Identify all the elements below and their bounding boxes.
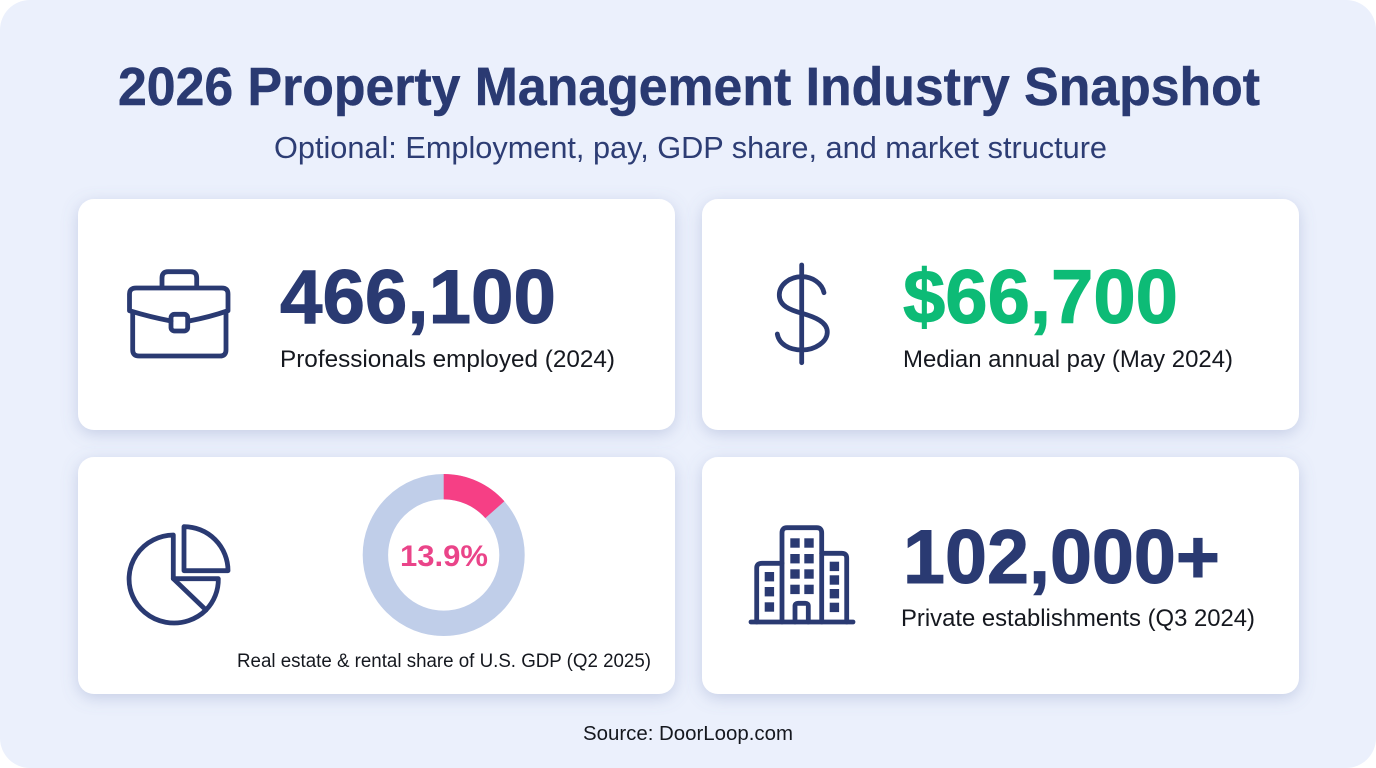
icon: pie chart: [129, 527, 228, 623]
panel: median pay: [702, 199, 1299, 430]
label: GDP share: Real estate & rental share of U.S. GDP (Q2 2025): [237, 651, 651, 672]
stat: $66,700: $66,700: [903, 255, 1178, 340]
subtitle: Optional: Employment, pay, GDP share, and market structure: [274, 130, 1107, 165]
donut value: 13.9%: [400, 540, 488, 573]
panel: professionals employed: [78, 199, 675, 430]
panel: private establishments: [702, 457, 1299, 694]
panel: GDP share: [78, 457, 675, 694]
source note: Source: DoorLoop.com: [583, 723, 793, 745]
stat: 466,100: 466,100: [280, 255, 556, 340]
icon: dollar sign: [777, 265, 827, 363]
label: median annual pay: Median annual pay (May 2024): [903, 346, 1233, 373]
title: 2026 Property Management Industry Snapshot: [118, 57, 1260, 117]
stat: 102,000+: 102,000+: [903, 515, 1220, 600]
label: private establishments: Private establishments (Q3 2024): [901, 605, 1255, 632]
donut chart: [375, 474, 512, 623]
icon: office buildings: [751, 528, 853, 622]
label: professionals employed: Professionals employed (2024): [280, 346, 615, 373]
icon: briefcase: [130, 272, 228, 356]
